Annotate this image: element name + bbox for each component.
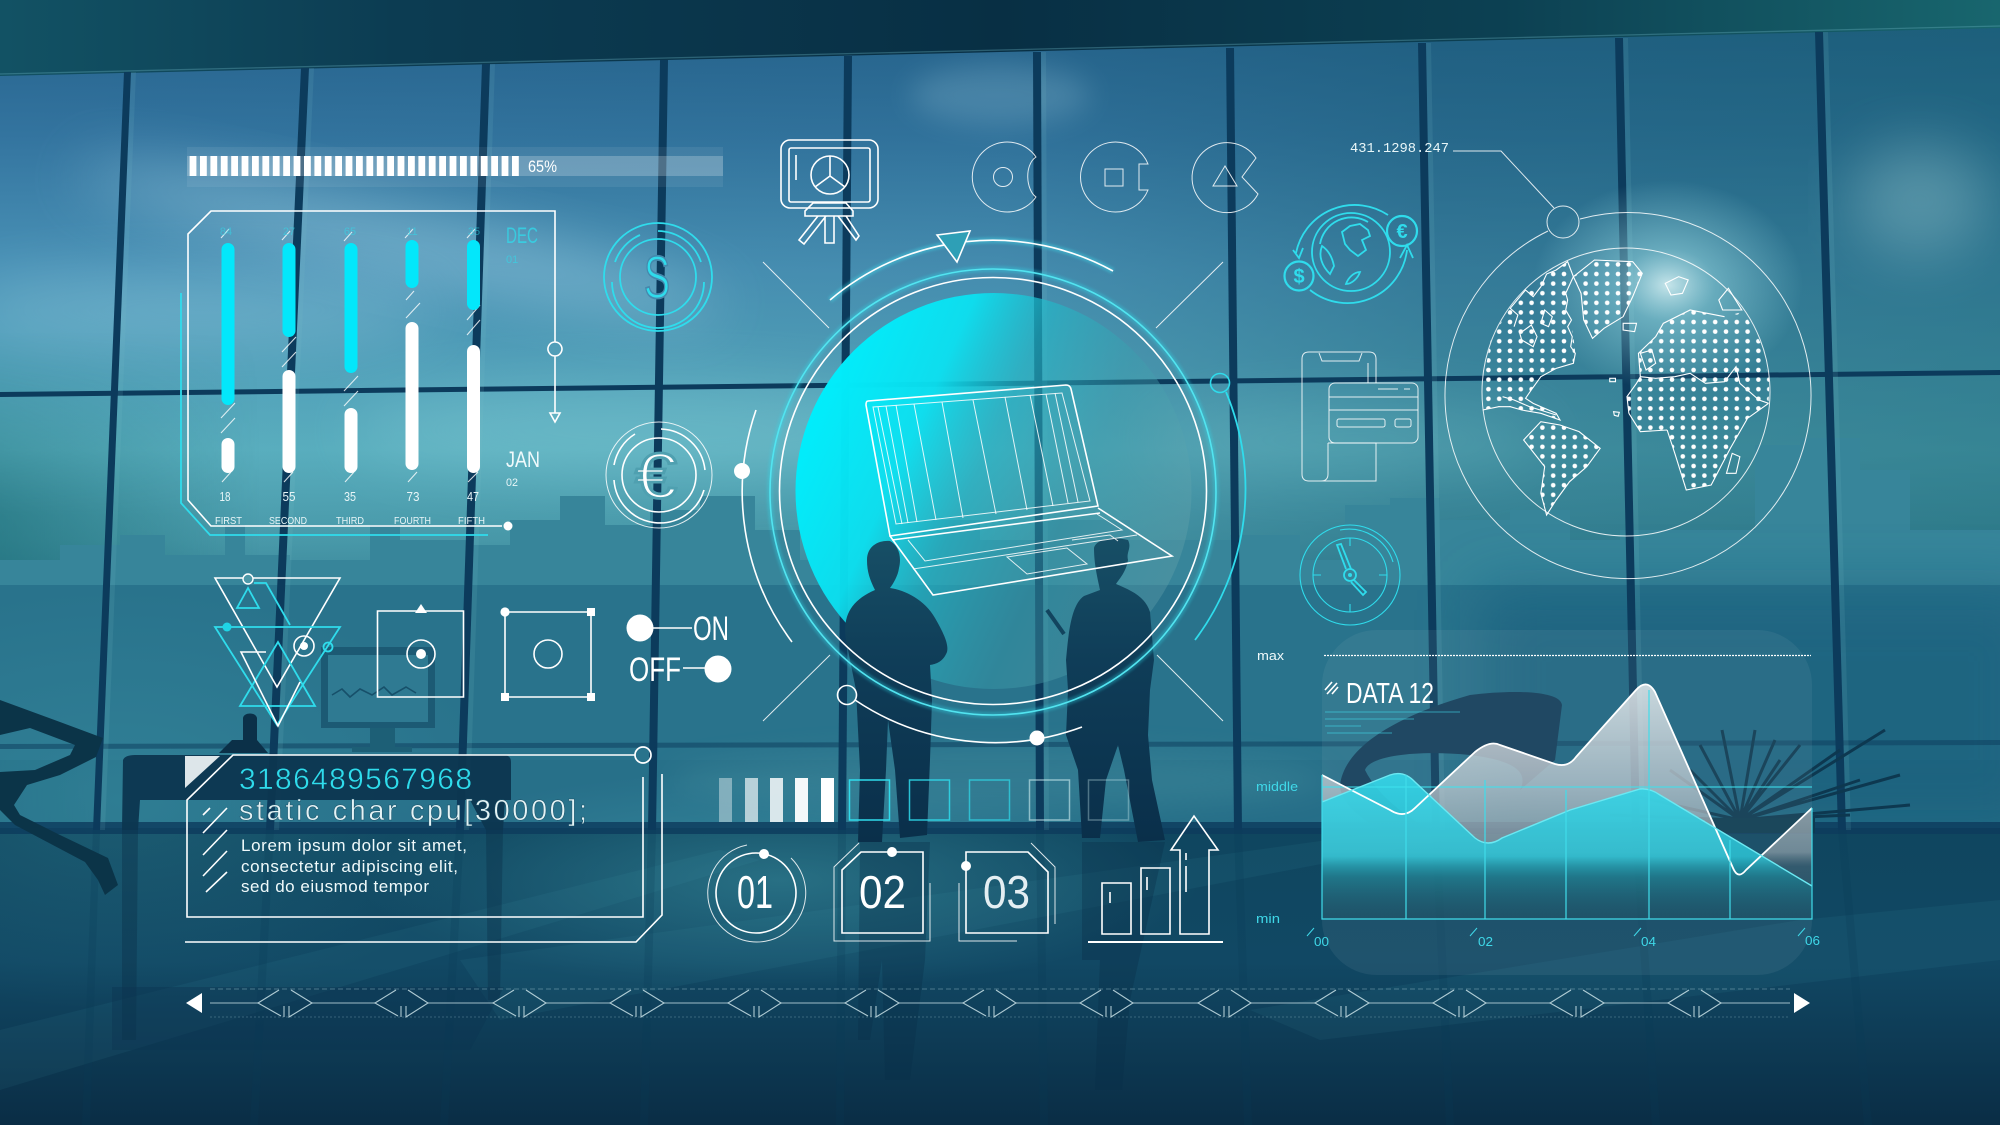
cyan area series: [1322, 774, 1812, 919]
x labels: 00: [1314, 934, 1329, 949]
badge 01: [708, 845, 806, 942]
top triangle marker: [937, 231, 970, 262]
left arrow: [186, 993, 202, 1013]
bottom values: [220, 489, 479, 504]
dotted continents: [1486, 262, 1770, 506]
x labels: 02: [1478, 934, 1493, 949]
ON toggle: ON: [693, 610, 729, 648]
body text: Lorem ipsum dolor sit amet,: [241, 836, 467, 855]
category labels: FOURTH: [394, 515, 431, 527]
left dot: [734, 463, 750, 479]
max line: [1324, 654, 1811, 656]
icon: dollar coin: S: [644, 244, 670, 311]
progress bar 65%: 65%: [528, 157, 557, 176]
top label 431.1298.247: 431.1298.247: [1350, 141, 1449, 157]
white series line: [1322, 684, 1812, 875]
hatch marks: [203, 808, 227, 892]
icon: growth bars with arrow: [1088, 816, 1223, 942]
badge 03: 03: [983, 866, 1030, 918]
x labels: 06: [1805, 933, 1820, 948]
y labels: max: [1257, 648, 1285, 663]
icon: euro coin: €: [635, 440, 677, 512]
heading hatch icon: [1325, 682, 1338, 694]
timeline markers: [258, 990, 1721, 1017]
cyan series line: [1322, 774, 1812, 886]
code line: static char cpu[30000];: [239, 795, 587, 827]
top values: 27: [283, 226, 295, 238]
toggle ON / OFF: [626, 610, 732, 689]
globe glow: [1533, 180, 1803, 390]
badge 02: 02: [859, 866, 906, 918]
callout node: [1547, 206, 1579, 238]
icon: laptop: [866, 385, 1172, 595]
y labels: [1256, 648, 1298, 926]
panel: globe: [1445, 151, 1811, 579]
icon: phone and credit card: [1302, 352, 1418, 481]
x ticks: [1307, 928, 1805, 936]
frame end dot: [504, 522, 512, 530]
left arc: [742, 410, 792, 642]
corner node: [635, 747, 651, 763]
icon: world money exchange: [1284, 205, 1417, 303]
corner triangle: [185, 756, 220, 788]
silhouette: man: [845, 541, 947, 842]
bottom hollow node: [838, 686, 856, 704]
panel: DATA 12 area chart: [1256, 630, 1820, 975]
body text: [241, 836, 467, 896]
chart frame: [188, 211, 555, 526]
top values: 84: [220, 226, 232, 238]
right arc: [1195, 392, 1246, 640]
furniture silhouettes: [0, 647, 1910, 1050]
reflections of figures on floor: [858, 842, 1165, 1090]
inner globe ring: [1482, 248, 1770, 536]
bottom arc: [855, 700, 1082, 743]
DATA 12 heading: DATA 12: [1346, 678, 1434, 710]
y labels: min: [1256, 911, 1280, 926]
x labels: 04: [1641, 934, 1656, 949]
top values: 11: [406, 226, 418, 238]
progress bar 65%: [187, 147, 723, 187]
central glowing disc: [796, 293, 1192, 689]
icon: square with target: [378, 604, 464, 697]
top values: 65: [344, 226, 356, 238]
grid lines and axis: [1322, 690, 1812, 919]
bottom values: 73: [406, 489, 420, 504]
JAN sub label: 02: [506, 477, 518, 489]
icon: circle with notch, inner triangle: [1192, 143, 1258, 213]
x labels: [1314, 933, 1820, 949]
chart translucent backdrop: [1322, 630, 1812, 975]
diagonal rays: [763, 262, 1223, 721]
heading underlines: [1325, 712, 1460, 733]
timeline axis: [210, 1002, 1790, 1004]
icon: triangles: [215, 574, 340, 726]
DEC sub label: 01: [506, 254, 518, 266]
right hollow node: [1210, 374, 1230, 392]
white step bars: [719, 778, 834, 822]
JAN label: JAN: [506, 447, 540, 472]
timeline: [186, 989, 1810, 1017]
icon: square with handles: [500, 607, 595, 701]
panel: code text box: [185, 747, 662, 942]
category labels: FIFTH: [458, 515, 485, 527]
callout leader line: [1453, 151, 1554, 208]
bottom values: 47: [467, 489, 479, 504]
outlined step squares: [850, 780, 1128, 820]
panel: bar chart: [181, 211, 562, 535]
silhouette: woman: [1047, 538, 1165, 842]
icon: dollar coin: [604, 223, 712, 331]
icon: clock: [1300, 525, 1400, 625]
hatch marks between bars: [221, 229, 480, 482]
top arc: [830, 240, 1113, 300]
icon: presentation board: [781, 140, 878, 244]
white area series: [1322, 684, 1812, 919]
badge 01: 01: [737, 866, 773, 918]
top values: [220, 226, 480, 238]
continent outlines: [1483, 260, 1769, 515]
bottom values: 35: [344, 489, 356, 504]
DEC label: DEC: [506, 223, 538, 248]
icon: world money exchange: $: [1293, 266, 1305, 288]
outer globe ring: [1445, 213, 1811, 579]
chart cyan outer frame: [181, 293, 488, 535]
middle line: [1322, 786, 1812, 788]
right arrow: [1794, 993, 1810, 1013]
icon: circle with notch, inner circle: [972, 142, 1036, 212]
outer frame: [185, 774, 662, 942]
category labels: SECOND: [269, 515, 307, 527]
timeline faint guide lines: [210, 988, 1790, 990]
OFF toggle: OFF: [629, 651, 681, 689]
icon: euro coin: [606, 422, 712, 528]
y labels: middle: [1256, 779, 1298, 794]
badge 02: [834, 843, 930, 941]
category labels: FIRST: [215, 515, 243, 527]
icon: world money exchange: €: [1396, 221, 1408, 243]
number heading: 3186489567968: [239, 763, 472, 796]
down arrow with node: [548, 342, 562, 422]
central dial rings: [734, 231, 1246, 746]
bottom dot: [1030, 730, 1044, 746]
category labels: [215, 515, 485, 527]
category labels: THIRD: [336, 515, 364, 527]
badge 03: [959, 843, 1055, 941]
body text: sed do eiusmod tempor: [241, 877, 429, 896]
top values: 35: [468, 226, 480, 238]
icon: circle with notch, inner square: [1081, 142, 1148, 212]
panel frame: [187, 755, 643, 917]
bottom values: 18: [220, 489, 230, 504]
cyan bars: [222, 240, 480, 405]
bottom values: 55: [282, 489, 296, 504]
white bars: [222, 322, 480, 473]
body text: consectetur adipiscing elit,: [241, 857, 458, 876]
